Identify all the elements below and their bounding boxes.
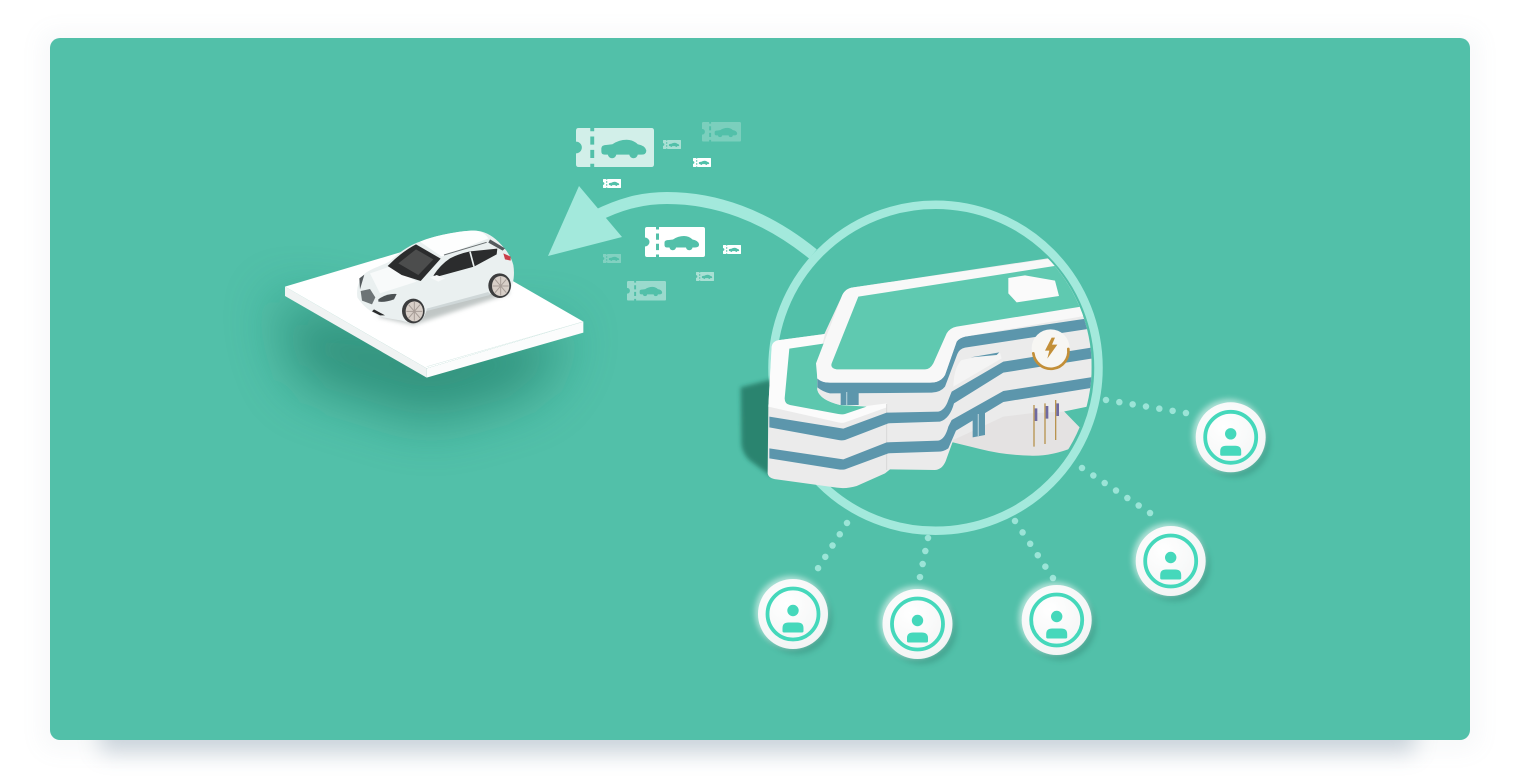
car on platform (285, 231, 583, 378)
user icon 1 (755, 576, 832, 654)
building (741, 250, 1103, 488)
ring around building (772, 205, 1098, 531)
user icon 5 (1193, 399, 1270, 477)
user icons (755, 399, 1270, 664)
car (357, 231, 514, 325)
blue window bands (817, 316, 1103, 393)
user icon 3 (1019, 582, 1096, 660)
flags (1034, 400, 1059, 447)
wheels (402, 273, 511, 323)
building cast shadow (741, 379, 772, 477)
upper tier wall (817, 376, 884, 406)
curved arrow toward car (548, 186, 813, 256)
building body (768, 250, 1103, 488)
entrance canopy (953, 353, 1002, 387)
user icon 2 (880, 586, 956, 664)
dotted connector lines (818, 400, 1187, 579)
large white ticket (645, 227, 705, 257)
platform shadow (275, 300, 570, 420)
tickets (576, 122, 741, 300)
charging badge (1032, 329, 1070, 369)
plaza (950, 411, 1081, 456)
lower roof (785, 343, 867, 414)
roof hatch (1008, 275, 1059, 302)
upper roof (831, 266, 1080, 370)
large faded ticket (576, 128, 654, 167)
doors (841, 392, 985, 437)
lower roof rim (768, 334, 887, 423)
upper roof rim (816, 259, 1084, 383)
white platform (285, 240, 583, 378)
user icon 4 (1133, 523, 1210, 601)
small tickets (603, 122, 741, 300)
